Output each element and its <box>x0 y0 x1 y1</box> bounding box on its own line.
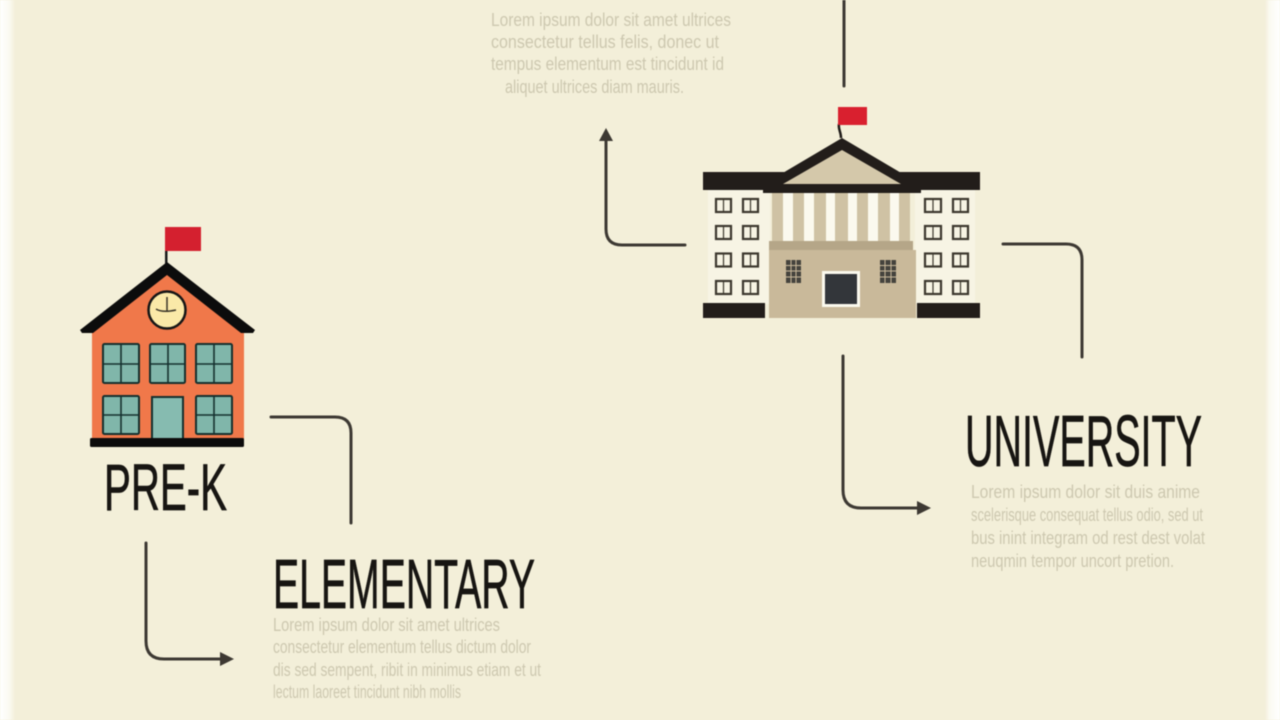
arrow: university down to text <box>843 356 931 515</box>
arrow: university to university label <box>1003 244 1082 357</box>
text block: university paragraph: Lorem ipsum dolor sit duis anime <box>971 482 1200 502</box>
heading: elementary: ELEMENTARY <box>273 545 535 623</box>
text block: university paragraph: neuqmin tempor uncort pretion. <box>971 551 1174 571</box>
text block: elementary paragraph <box>273 615 541 702</box>
school roof <box>80 262 255 333</box>
school clock <box>148 292 186 328</box>
heading: pre-k: PRE-K <box>104 450 227 524</box>
icon: university building <box>703 107 980 318</box>
arrow: pre-k to elementary <box>271 417 351 523</box>
text block: elementary paragraph: dis sed sempent, ribit in minimus etiam et ut <box>273 660 541 680</box>
text block: top paragraph: Lorem ipsum dolor sit amet ultrices <box>491 10 731 30</box>
text block: elementary paragraph: lectum laoreet tincidunt nibh mollis <box>273 682 461 702</box>
text block: top paragraph: aliquet ultrices diam mauris. <box>505 77 684 97</box>
arrow: pre-k down to text <box>146 543 234 666</box>
text block: top paragraph: consectetur tellus felis, donec ut <box>491 32 719 52</box>
text block: top paragraph <box>491 10 731 97</box>
university wings <box>708 190 975 304</box>
text block: elementary paragraph: consectetur elementum tellus dictum dolor <box>273 637 531 657</box>
school windows <box>103 343 232 434</box>
university flag <box>838 107 867 138</box>
arrow: university to top paragraph <box>599 128 685 245</box>
university columns <box>772 192 910 244</box>
university main block <box>769 241 916 318</box>
text block: top paragraph: tempus elementum est tincidunt id <box>491 54 724 74</box>
university roof <box>703 138 980 193</box>
school flag <box>165 227 201 264</box>
text block: university paragraph <box>971 482 1205 571</box>
school base <box>90 438 244 447</box>
school door <box>152 397 183 439</box>
icon: school house <box>80 227 255 447</box>
arrow: line from top into university <box>842 0 846 86</box>
university base bars <box>703 303 980 318</box>
text block: university paragraph: bus inint integram od rest dest volat <box>971 528 1205 548</box>
school wall <box>92 272 244 440</box>
text block: elementary paragraph: Lorem ipsum dolor sit amet ultrices <box>273 615 500 635</box>
